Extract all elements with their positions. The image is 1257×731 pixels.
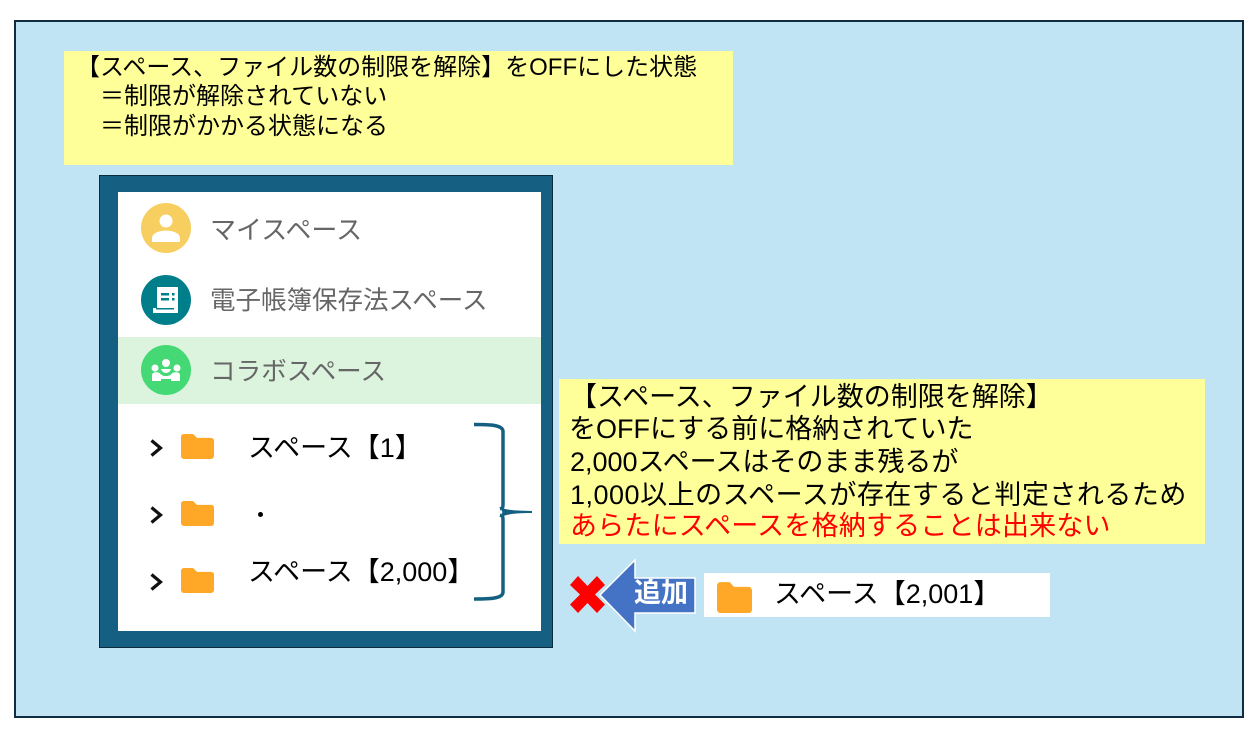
label: my space: マイスペース bbox=[210, 215, 362, 245]
list white area bbox=[118, 192, 541, 631]
label: collab space: コラボスペース bbox=[210, 358, 386, 386]
icon: collab space bbox=[141, 345, 191, 395]
arrow: add: 追加 bbox=[634, 578, 688, 608]
callout: top explanation bbox=[64, 51, 733, 165]
highlighted row bbox=[118, 337, 541, 404]
callout line 2: ＝制限が解除されていない bbox=[100, 83, 387, 110]
callout line 4: 1,000以上のスペースが存在すると判定されるため bbox=[570, 480, 1187, 510]
icon: my space bbox=[141, 203, 191, 253]
icon: e-book storage bbox=[141, 275, 191, 325]
chevron bbox=[150, 573, 163, 591]
box: new space bbox=[704, 573, 1050, 617]
label: e-book storage: 電子帳簿保存法スペース bbox=[210, 287, 487, 315]
icon: folder bbox=[181, 501, 214, 526]
brace bbox=[474, 422, 532, 601]
icon: red cross bbox=[570, 576, 605, 613]
folder row 1 bbox=[150, 433, 422, 463]
folder label: スペース【2,000】 bbox=[248, 557, 474, 587]
callout line 3: 2,000スペースはそのまま残るが bbox=[570, 447, 958, 477]
callout line 2: をOFFにする前に格納されていた bbox=[569, 414, 973, 444]
icon: folder bbox=[717, 582, 752, 613]
dot bbox=[258, 512, 263, 517]
icon: folder bbox=[181, 434, 214, 459]
folder row 2 bbox=[150, 501, 263, 526]
panel: space list bbox=[99, 175, 553, 648]
chevron bbox=[150, 439, 163, 457]
folder label: スペース【2,001】 bbox=[774, 579, 1000, 609]
chevron bbox=[150, 506, 163, 524]
arrow: add bbox=[599, 558, 696, 633]
callout: explanation right bbox=[559, 379, 1205, 544]
callout line 3: ＝制限がかかる状態になる bbox=[100, 113, 388, 140]
callout line 1: 【スペース、ファイル数の制限を解除】をOFFにした状態 bbox=[76, 54, 697, 81]
folder row 3 bbox=[150, 557, 474, 593]
callout line 5 red: あらたにスペースを格納することは出来ない bbox=[570, 511, 1111, 541]
icon: folder bbox=[181, 568, 214, 593]
callout line 1: 【スペース、ファイル数の制限を解除】 bbox=[570, 382, 1053, 412]
folder label: スペース【1】 bbox=[248, 433, 422, 463]
